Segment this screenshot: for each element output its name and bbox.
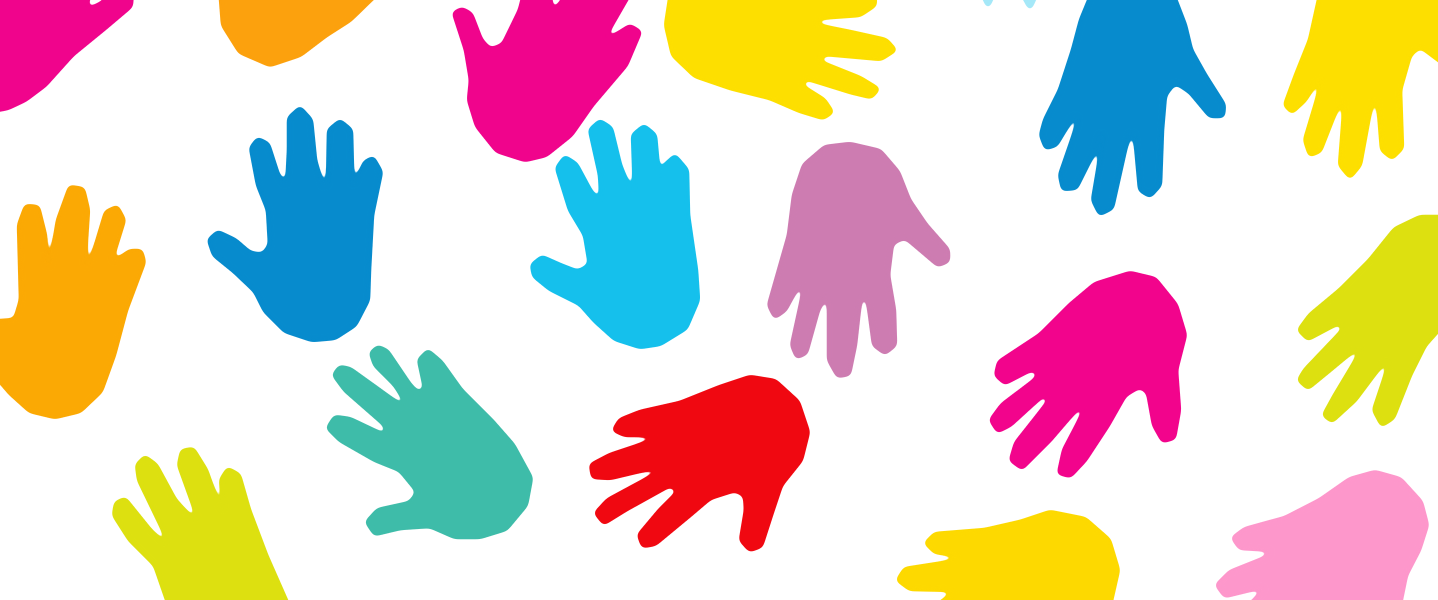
- hand: yellow top: [666, 0, 895, 118]
- hand: magenta right: [991, 273, 1185, 476]
- hand: blue left: [209, 108, 381, 340]
- hand: orange left: [0, 187, 144, 417]
- hand: magenta top centre: [454, 0, 640, 160]
- hand: mauve centre: [769, 144, 948, 376]
- hand: lime bottom left: [114, 449, 292, 600]
- hand: pale blue fingertips at top edge: [979, 0, 1040, 8]
- hand: yellow bottom: [898, 512, 1118, 600]
- hand: magenta top left: [0, 0, 132, 112]
- hand: cyan centre: [532, 121, 698, 347]
- hand: yellow top right: [1285, 0, 1438, 177]
- hand: red centre: [591, 377, 808, 550]
- hand: lime right: [1299, 217, 1438, 425]
- hand: teal bottom left: [328, 347, 531, 537]
- hand: pink bottom right: [1217, 472, 1427, 600]
- hand: orange top: [220, 0, 385, 65]
- hand: blue top right: [1041, 0, 1224, 214]
